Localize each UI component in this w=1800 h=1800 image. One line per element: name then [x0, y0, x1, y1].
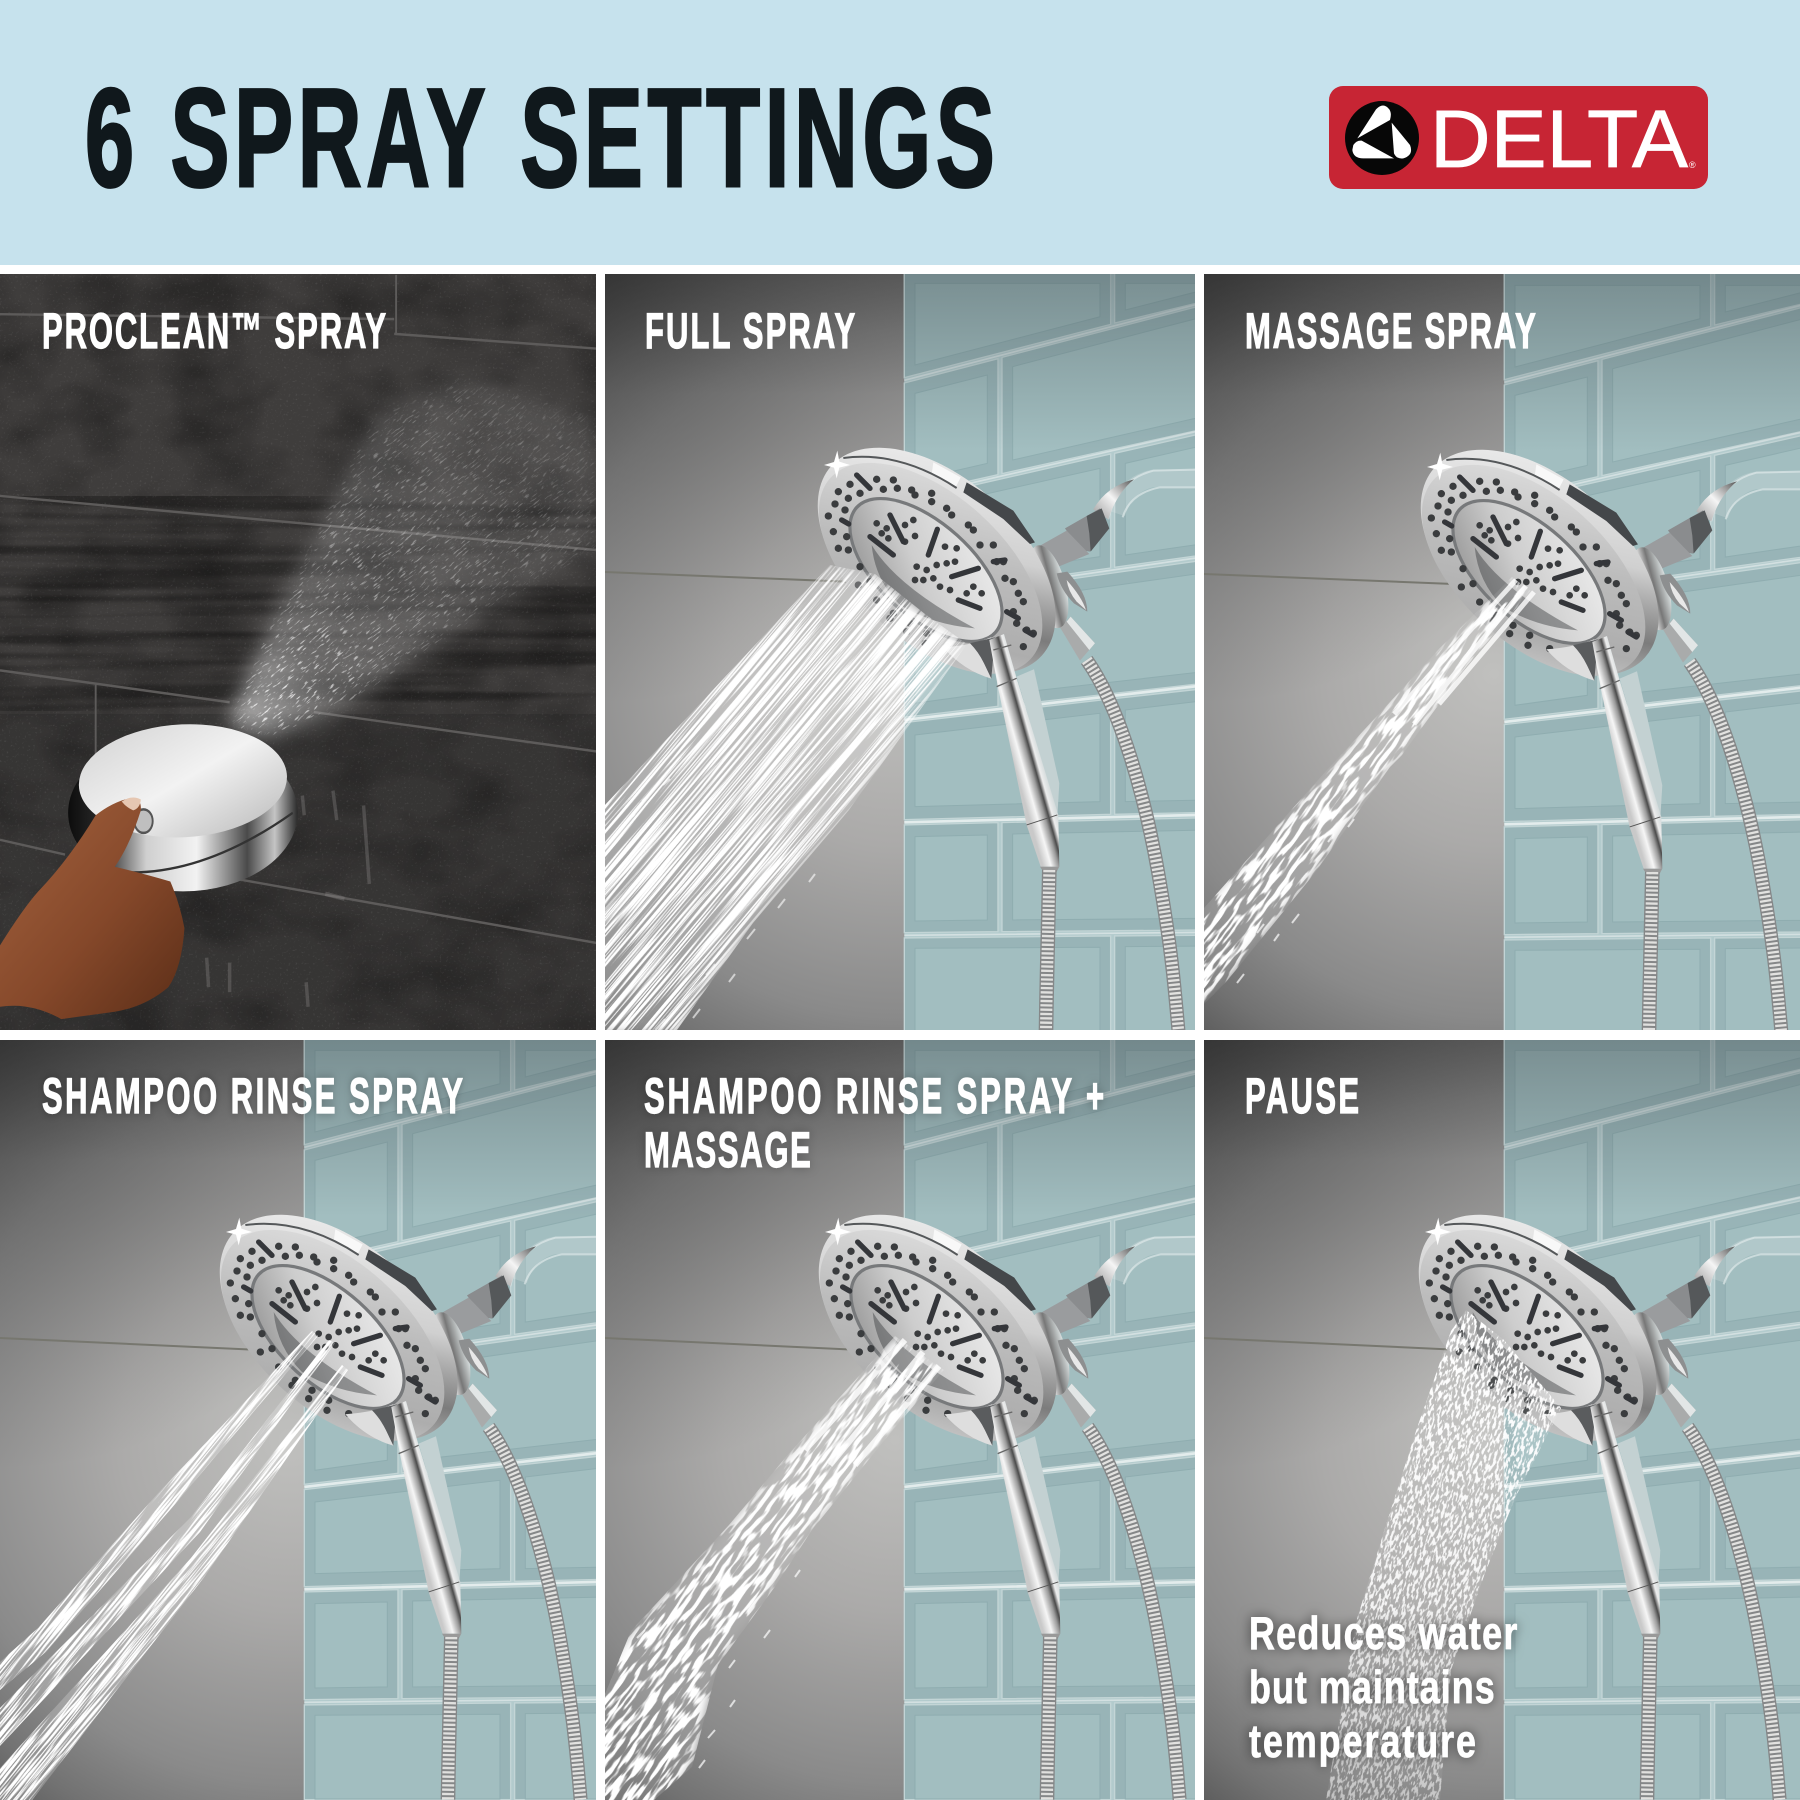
- logo: Delta: [1329, 86, 1708, 189]
- water drops: [1326, 1310, 1561, 1800]
- label: MASSAGE SPRAY: [1245, 302, 1536, 359]
- title: 6 SPRAY SETTINGS: [85, 59, 995, 216]
- note text: Reduces water: [1249, 1608, 1517, 1659]
- label: MASSAGE: [644, 1121, 811, 1178]
- label: SHAMPOO RINSE SPRAY +: [644, 1067, 1104, 1124]
- note text: [1249, 1608, 1517, 1767]
- tile wall: [904, 263, 1211, 1033]
- shower head: [1377, 1171, 1800, 1800]
- label: PAUSE: [1245, 1067, 1359, 1124]
- label: PROCLEAN™ SPRAY: [42, 302, 386, 359]
- panel: shampoo rinse spray plus massage: [605, 1040, 1195, 1800]
- panel: massage spray: [1204, 274, 1800, 1030]
- panel: full spray: [605, 274, 1195, 1030]
- water spray: [605, 1336, 944, 1800]
- label: SHAMPOO RINSE SPRAY: [42, 1067, 463, 1124]
- tile wall: [304, 1030, 611, 1800]
- water spray: [605, 565, 967, 1030]
- logo: Delta: DELTA: [1430, 94, 1688, 185]
- logo: Delta: ®: [1689, 160, 1696, 170]
- shower head: [776, 404, 1210, 1033]
- panel: shampoo rinse spray: [0, 1040, 596, 1800]
- label: [644, 1067, 1104, 1178]
- tile wall: [904, 1030, 1211, 1800]
- tile wall: [1504, 265, 1800, 1035]
- mist: [228, 378, 596, 737]
- shower head: [178, 1171, 612, 1800]
- note text: temperature: [1249, 1716, 1476, 1767]
- water spray: [1204, 577, 1534, 1004]
- note text: but maintains: [1249, 1662, 1495, 1713]
- panel: ProClean spray: [0, 274, 596, 1030]
- header band: [0, 0, 1800, 265]
- label: FULL SPRAY: [645, 302, 855, 359]
- shower head: [777, 1171, 1211, 1800]
- panel: pause: [1204, 1040, 1800, 1800]
- chrome hand shower: [68, 720, 298, 891]
- water spray: [0, 1331, 348, 1800]
- water spray: [228, 378, 596, 737]
- tile wall: [1504, 1030, 1800, 1800]
- hand: [0, 797, 184, 1019]
- shower head: [1379, 406, 1800, 1035]
